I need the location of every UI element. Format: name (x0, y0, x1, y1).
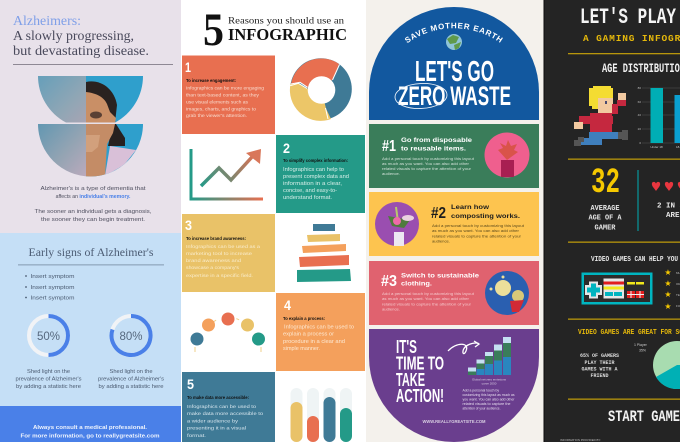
text block: statistic note left (16, 369, 82, 390)
list: symptoms (25, 274, 75, 302)
card 2: composting: audience. (432, 240, 450, 244)
chart: stacked bars (468, 337, 511, 375)
tile 5: accessible data: a wider audience by (187, 418, 239, 424)
text block: Alzheimer's definition: Alzheimer's is a type of dementia that (40, 186, 146, 192)
card 2: composting: #2 (431, 205, 446, 222)
heading: Alzheimers: Alzheimers: (13, 14, 81, 29)
card 3: sustainable clothing: clothing. (401, 280, 432, 288)
card 3: sustainable clothing: Switch to sustainable (401, 272, 479, 280)
heading: Alzheimers: A slowly progressing, (13, 29, 134, 44)
list: benefits with stars: ★ (664, 290, 672, 299)
tile 2: complex information: To simplify complex information: (283, 158, 348, 163)
text block: action description: Add a personal touch by (462, 388, 499, 392)
tile 1: engagement: than text-based content, as they (186, 92, 260, 98)
text block: Alzheimer's definition: the sooner they can begin treatment. (41, 217, 145, 223)
title: let's go zero waste (394, 56, 511, 111)
heading: 5 reasons: INFOGRAPHIC (228, 25, 347, 44)
tile 2: complex information: concise, and easy-to- (283, 188, 337, 194)
card 2: composting: composting works. (451, 213, 520, 220)
heading: Alzheimers: but devastating disease. (13, 44, 149, 59)
icon: earth (446, 34, 462, 50)
tile 4: explain a process (276, 293, 365, 371)
heading: Early signs: Early signs of Alzheimer's (28, 247, 154, 259)
dome header (369, 7, 539, 120)
text block: statistic note right: prevalence of Alzheimer's (98, 376, 164, 382)
card 3: sustainable clothing: Add a personal touch by customizing this layout (382, 292, 474, 296)
tile 3: brand awareness: showcase a company's (186, 265, 240, 271)
tile 3: brand awareness: marketing tool to increase (186, 251, 252, 257)
list: benefits with stars: ★ (664, 302, 672, 311)
tile 4: explain a process: To explain a process: (283, 316, 325, 321)
chart: 50% donut: 50% (37, 331, 60, 343)
headline: it's time to take action: TIME TO (396, 352, 444, 374)
tile 3: brand awareness: brand awareness and (186, 258, 241, 264)
tile 2: complex information: information in a clear, (283, 181, 342, 187)
text block: statistic note right: Shed light on the (110, 369, 153, 375)
chart: age distribution bars: 0 (639, 141, 641, 145)
stat: average age 32 (588, 163, 622, 232)
icon: pixel runner (574, 86, 628, 146)
chart: age distribution bars: 60 (638, 100, 641, 104)
stat: average age 32: AVERAGE (590, 205, 620, 213)
tile 5: accessible data: make data more accessible to (187, 411, 263, 417)
text block: Alzheimer's definition (34, 186, 152, 223)
photo: vases with flowers (375, 202, 419, 246)
text block: statistic note right: by adding a statistic here (98, 384, 164, 390)
card 2: composting: Learn how (451, 204, 490, 211)
headline: it's time to take action (396, 336, 444, 406)
chart: age distribution bars: Under 18 (650, 145, 663, 149)
card 2: composting (369, 192, 539, 256)
text block: statistic note right (98, 369, 164, 390)
card 3: sustainable clothing (369, 261, 539, 325)
panel: zero waste infographic (366, 0, 544, 442)
card 1: reusable items: Add a personal touch by customizing this layout (382, 157, 474, 161)
text block: Alzheimer's definition: affects an individual's memory. (56, 194, 131, 200)
text block: 65% of gamers (580, 352, 619, 379)
tile 3: brand awareness (182, 214, 275, 292)
call to action panel (369, 329, 539, 442)
headline: it's time to take action: TAKE (396, 369, 425, 390)
list: benefits with stars: ★ (664, 279, 672, 288)
panel: gaming infographic (544, 0, 680, 442)
stat: hearts 2 in 5 (652, 182, 680, 220)
card 1: reusable items: as much as you want. You can also add other (382, 162, 470, 166)
tile 3: brand awareness: To increase brand awareness: (186, 236, 246, 241)
list: benefits with stars (664, 268, 680, 311)
card 2: composting: Add a personal touch by customizing this layout (432, 224, 524, 228)
tile 2: complex information: Infographics can help to (283, 167, 344, 173)
tile 5: accessible data: 5 (187, 376, 194, 392)
stat: average age 32: 32 (591, 163, 620, 203)
stat: average age 32: AGE OF A (588, 214, 622, 222)
list: benefits with stars: ★ (664, 268, 672, 277)
title: let's go zero waste: ZERO WASTE (398, 81, 511, 111)
curved tagline: SAVE MOTHER EARTH (405, 22, 503, 43)
heading: 5 reasons: Reasons you should use an (228, 16, 344, 26)
chart caption: Global net-zero emissions (472, 378, 506, 382)
tile 5: accessible data: Infographics can be used to (187, 404, 256, 410)
card 3: sustainable clothing: as much as you want. You can also add other (382, 297, 470, 301)
chart: stacked pyramid (297, 224, 351, 282)
text block: 65% of gamers: FRIEND (590, 372, 609, 379)
text block: Alzheimer's definition: The sooner an individual gets a diagnosis, (34, 209, 152, 215)
chart caption (472, 378, 506, 386)
chart: circular arrows donut (290, 58, 352, 121)
tile 3: brand awareness: expertise in a specific field. (186, 273, 253, 279)
text block: statistic note left: Shed light on the (27, 369, 70, 375)
list: benefits with stars: TE (676, 293, 680, 297)
chart: 80% donut: 80% (119, 331, 143, 343)
chart: age distribution bars: 80 (638, 86, 641, 90)
tile 1: engagement: Infographics can be more engaging (186, 86, 265, 90)
text block: action description (462, 388, 515, 410)
chart: rising arrow (191, 149, 263, 199)
tile 4: explain a process: Infographics can be used to (284, 324, 354, 330)
card 3: sustainable clothing: #3 (381, 273, 397, 290)
text block: 65% of gamers: 65% OF GAMERS (580, 352, 619, 359)
card 2: composting: related visuals to capture the attention of your (432, 234, 522, 238)
title: let's go zero waste: LET'S GO (415, 56, 494, 88)
chart: arc of process circles (190, 312, 265, 352)
text block: action description: attention of your audience. (462, 406, 501, 410)
chart: 50% donut (29, 316, 68, 355)
text block: 65% of gamers: PLAY THEIR (584, 359, 615, 366)
tile 2: complex information (276, 135, 365, 213)
tile 4: explain a process: explain a process or (283, 332, 334, 338)
stat: average age 32: GAMER (594, 224, 616, 232)
tile 1: engagement (182, 56, 275, 134)
tile 2: complex information: understand format. (283, 195, 332, 201)
chart: 80% donut (112, 316, 151, 355)
card 1: reusable items: #1 (382, 138, 396, 155)
list: symptoms: Insert symptom (30, 296, 75, 302)
card 1: reusable items: related visuals to capture the attention of your (382, 167, 472, 171)
tile 5: accessible data (182, 372, 275, 442)
tile 1: engagement: To increase engagement: (186, 78, 236, 83)
footer: medical note: Always consult a medical professional. (33, 425, 148, 431)
arrow: squiggle (448, 341, 479, 354)
chart: player pie (634, 341, 680, 389)
tile 1: engagement: grab the viewer's attention. (186, 113, 247, 118)
text block: 65% of gamers: GAMES WITH A (582, 366, 618, 372)
heading: 5 reasons (203, 4, 347, 56)
chart: age distribution bars: 20 (638, 127, 641, 131)
footer: medical note (20, 425, 160, 440)
text block: action description: you want. You can also add other (462, 398, 515, 402)
icon: game controller (582, 272, 652, 304)
tile 3: brand awareness: 3 (185, 217, 192, 233)
tile 1: engagement: use visual elements such as (186, 100, 249, 104)
headline: it's time to take action: IT'S (396, 336, 417, 357)
website url: WWW.REALLYGREATSITE.COM (422, 419, 486, 424)
card 1: reusable items (369, 124, 539, 188)
tile 5: accessible data: format. (187, 433, 206, 439)
footer: medical note: For more information, go to reallygreatsite.com (20, 434, 160, 440)
photo: woman's portrait in half circles (38, 76, 144, 178)
text block: action description: customizing this layout as much as (462, 393, 515, 397)
tile 4: explain a process: simple manner. (283, 346, 320, 352)
chart: player pie: 1 Player (634, 343, 648, 347)
photo: pink flower (484, 132, 530, 178)
card 2: composting: as much as you want. You can also add other (432, 229, 520, 233)
tile 4: explain a process: 4 (284, 297, 291, 313)
card 1: reusable items: audience. (382, 172, 400, 176)
text block: statistic note left: prevalence of Alzheimer's (16, 376, 82, 382)
card 3: sustainable clothing: related visuals to capture the attention of your (382, 302, 472, 306)
chart: player pie: 35% (639, 348, 646, 352)
tile 1: engagement: 1 (185, 59, 191, 75)
photo: flowers on blue (485, 271, 529, 315)
tile 4: explain a process: procedure in a clear and (283, 339, 345, 345)
list: symptoms: Insert symptom (30, 274, 75, 280)
card 1: reusable items: Go from disposable (401, 137, 472, 144)
panel: Alzheimer's infographic (0, 0, 181, 442)
chart: age distribution bars (638, 86, 680, 149)
tile 1: engagement: images, charts, and graphics to (186, 106, 257, 112)
chart: rounded bars (290, 388, 352, 442)
chart caption: curve 2050 (482, 382, 497, 386)
chart: age distribution bars: 40 (638, 113, 641, 117)
tile 3: brand awareness: Infographics can be used as a (186, 244, 260, 250)
card 1: reusable items: to reusable items. (401, 146, 466, 152)
stat: hearts 2 in 5: ARE (666, 212, 680, 220)
tile 2: complex information: present complex data and (283, 174, 349, 180)
heading: 5 reasons: 5 (203, 4, 224, 56)
tile 2: complex information: 2 (283, 140, 290, 156)
text block: action description: related visuals to capture the (462, 402, 511, 406)
footer: information credit: INFORMATION PROVIDED BY: (560, 438, 601, 442)
tile 5: accessible data: To make data more accessible: (187, 395, 249, 400)
list: symptoms: Insert symptom (30, 285, 75, 291)
heading: Alzheimers (13, 14, 149, 59)
headline: it's time to take action: ACTION! (396, 385, 444, 406)
tile 5: accessible data: presenting it in a visual (187, 426, 246, 432)
panel: 5 reasons infographic (182, 0, 366, 442)
card 3: sustainable clothing: audience. (382, 308, 400, 312)
text block: statistic note left: by adding a statistic here (16, 384, 81, 390)
